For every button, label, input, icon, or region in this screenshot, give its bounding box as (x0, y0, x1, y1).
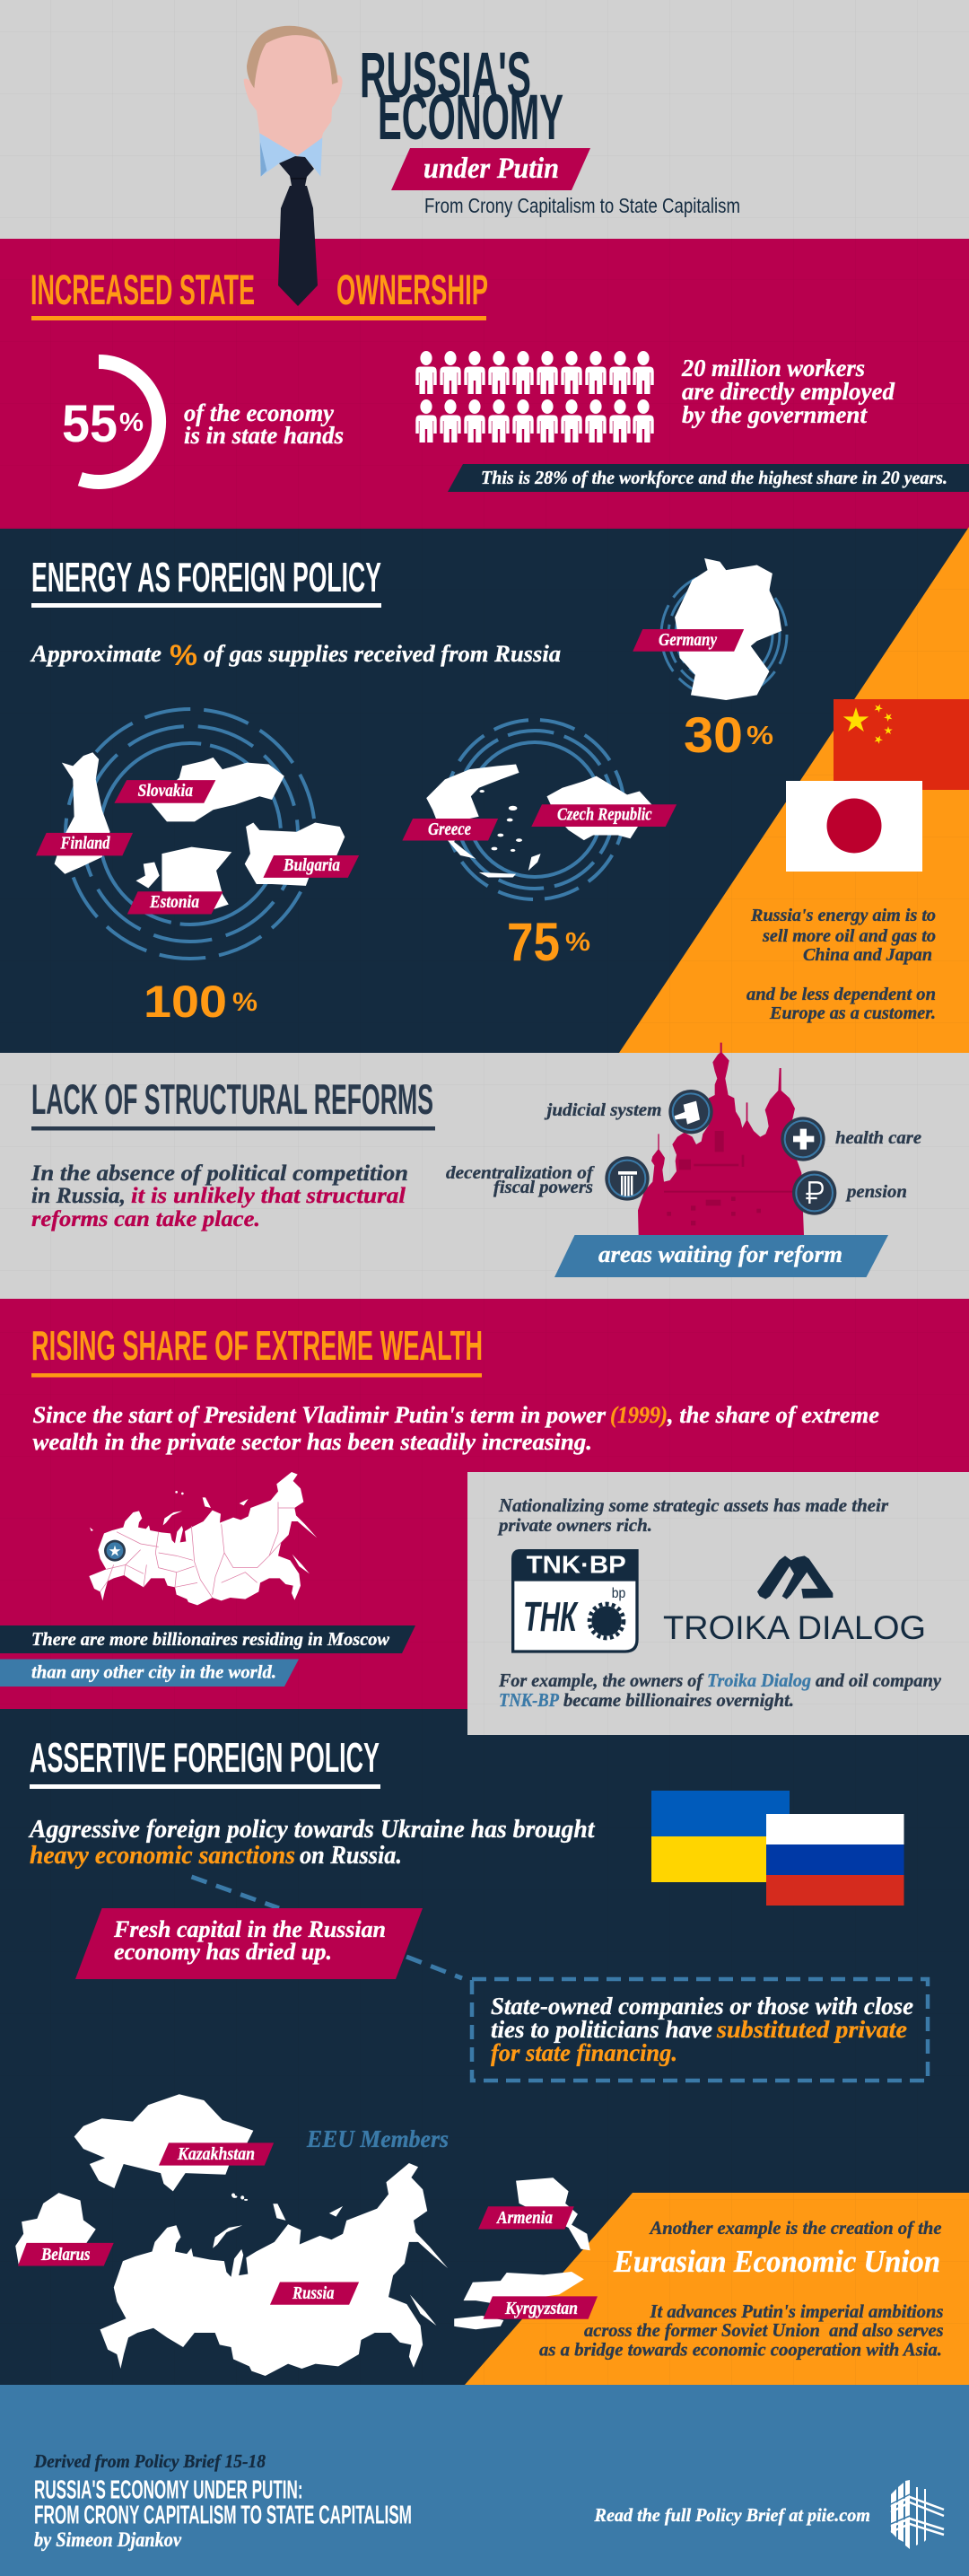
text: Russia's energy aim (746, 906, 936, 1023)
text: absence of political competition: In the absence of political competition (31, 1161, 408, 1186)
text: nationalizing strategic assets: private owners rich. (497, 1514, 652, 1536)
footer: source and title: Derived from Policy Brief 15-18 (33, 2450, 266, 2472)
text: since the start of Putin's term: wealth in the private sector has been steadily increasing. (32, 1429, 592, 1455)
footer: source and title: by Simeon Djankov (34, 2528, 182, 2551)
callout: fresh capital: Fresh capital in the Russian (113, 1916, 386, 1942)
map: Germany: Germany (659, 630, 717, 650)
text: 20 million workers (681, 355, 895, 428)
maps: EEU member states: Russia (292, 2283, 334, 2303)
logo: TNK-BP (511, 1549, 639, 1653)
stat: 75 percent: % (565, 928, 590, 957)
logo: TNK-BP: ТНК (523, 1593, 579, 1640)
heading: rising share of extreme wealth: RISING SHARE OF EXTREME WEALTH (31, 1322, 483, 1369)
callout: state-owned companies: substituted private (716, 2016, 907, 2043)
map: Russia with Moscow marker (89, 1472, 317, 1605)
heading: increased state ownership: INCREASED STATE (31, 266, 255, 313)
flag: Ukraine (651, 1791, 790, 1882)
label: EEU Members: EEU Members (306, 2125, 449, 2152)
illustration: cathedral silhouette (638, 1043, 804, 1235)
stat: 30 percent (684, 706, 773, 763)
text: 20 million workers: 20 million workers (681, 355, 865, 381)
donut stat: 55 percent: % (119, 408, 144, 437)
ribbon: any other city: than any other city in the world. (31, 1660, 276, 1682)
text: of the economy is in state hands (184, 399, 344, 449)
ribbon: areas waiting for reform (554, 1235, 888, 1277)
heading: assertive foreign policy (30, 1734, 380, 1789)
text: 20 million workers: by the government (682, 401, 868, 428)
subtitle: From Crony Capitalism to State Capitalism (424, 194, 740, 217)
callout: fresh capital (75, 1908, 423, 1979)
logo: Troika Dialog: TROIKA DIALOG (663, 1609, 926, 1646)
pictogram: 20 million workers (415, 351, 654, 442)
map group: 100 percent countries: Slovakia (138, 781, 193, 801)
logo: TNK-BP: bp (612, 1586, 625, 1601)
portrait illustration: Putin with tie (244, 26, 343, 306)
callout: state-owned companies: ties to politicians have (491, 2016, 712, 2043)
text: Russia's energy aim: Europe as a customer. (769, 1003, 936, 1023)
maps: EEU member states (15, 2094, 598, 2376)
stat: 30 percent: 30 (684, 706, 743, 763)
text panel: Eurasian Economic Union: Another example is the creation of the (649, 2217, 942, 2239)
donut stat: 55 percent (62, 362, 159, 482)
map group: 100 percent countries: Estonia (149, 892, 199, 912)
reform area labels: health care (835, 1128, 921, 1148)
ribbon: areas waiting for reform: areas waiting for reform (598, 1240, 842, 1267)
stat: 100 percent: 100 (144, 977, 227, 1027)
heading: increased state ownership: OWNERSHIP (336, 266, 488, 313)
text: owners became billionaires: became billionaires overnight. (563, 1689, 794, 1711)
text: since the start of Putin's term: , the share of extreme (667, 1402, 879, 1428)
ribbon: billionaires in Moscow: There are more billionaires residing in Moscow (31, 1628, 390, 1650)
heading: assertive foreign policy: ASSERTIVE FOREIGN POLICY (30, 1734, 380, 1781)
text: absence of political competition: in Russia, (31, 1184, 126, 1208)
text: owners became billionaires: and oil company (816, 1669, 942, 1691)
text: owners became billionaires (498, 1669, 942, 1711)
title: RUSSIA'S (360, 40, 531, 111)
maps: EEU member states: Kazakhstan (177, 2144, 255, 2164)
map group: 75 percent countries: Greece (428, 819, 471, 839)
footer: source and title (33, 2450, 412, 2551)
text panel: Eurasian Economic Union: across the former Soviet Union and also serves (584, 2319, 944, 2341)
text: owners became billionaires: Troika Dialog (707, 1669, 811, 1691)
donut stat: 55 percent: 55 (62, 395, 118, 453)
reform area labels: decentralization of (446, 1163, 595, 1183)
text: absence of political competition (31, 1161, 408, 1231)
callout: state-owned companies: State-owned companies or those with close (491, 1993, 913, 2020)
text: of the economy is in state hands: is in state hands (184, 422, 344, 449)
flag: Russia (766, 1814, 904, 1906)
text: of the economy is in state hands: of the economy (184, 399, 335, 426)
text: approximate percent of gas supplies: Approximate (30, 641, 162, 667)
icon: fiscal powers pillar (605, 1156, 650, 1201)
footer: source and title: FROM CRONY CAPITALISM TO STATE CAPITALISM (34, 2502, 412, 2530)
icon: pension ruble (792, 1170, 836, 1215)
reform area labels: judicial system (544, 1100, 662, 1120)
text panel: Eurasian Economic Union: Eurasian Economic Union (613, 2244, 940, 2279)
subtitle ribbon: under Putin (391, 148, 590, 190)
maps: EEU member states: Armenia (495, 2208, 553, 2228)
map group: 100 percent countries (36, 709, 359, 959)
logo: TNK-BP: TNK·BP (527, 1551, 626, 1579)
callout: state-owned companies (472, 1979, 928, 2081)
text: nationalizing strategic assets: Nationalizing some strategic assets has made their (498, 1494, 889, 1516)
logo: PIIE building (891, 2480, 944, 2549)
stat: 75 percent: 75 (507, 912, 560, 972)
text: since the start of Putin's term: (1999) (610, 1402, 668, 1428)
heading: rising share of extreme wealth (31, 1322, 483, 1377)
text: absence of political competition: reforms can take place. (31, 1207, 260, 1231)
text: approximate percent of gas supplies: % (170, 639, 197, 671)
text: nationalizing strategic assets (497, 1494, 889, 1536)
text: owners became billionaires: TNK-BP (499, 1689, 559, 1711)
stat: 30 percent: % (746, 722, 773, 750)
map group: 100 percent countries: Bulgaria (283, 855, 340, 875)
maps: EEU member states: Belarus (40, 2245, 91, 2265)
heading: energy as foreign policy: ENERGY AS FOREIGN POLICY (31, 554, 381, 600)
map group: 75 percent countries: Czech Republic (557, 804, 652, 824)
text panel: Eurasian Economic Union (539, 2217, 944, 2361)
banner: workforce share: This is 28% of the workforce and the highest share in 20 years. (481, 467, 947, 488)
logo: Troika Dialog (663, 1555, 926, 1646)
text: approximate percent of gas supplies (30, 639, 561, 671)
icon: judicial system gavel (668, 1090, 713, 1134)
text: since the start of Putin's term: Since the start of President Vladimir Putin's term in power (32, 1402, 607, 1428)
icon: health care cross (781, 1117, 825, 1161)
callout: state-owned companies: for state financing. (491, 2039, 677, 2066)
text: since the start of Putin's term (32, 1402, 879, 1455)
flag: Japan (786, 781, 922, 872)
text: aggressive foreign policy: heavy economic sanctions (30, 1842, 295, 1870)
text: aggressive foreign policy: on Russia. (300, 1842, 402, 1870)
map group: 75 percent countries (402, 720, 677, 899)
stat: 100 percent: % (232, 988, 258, 1017)
text: absence of political competition: it is unlikely that structural (131, 1184, 406, 1208)
ribbon: any other city (0, 1659, 299, 1687)
text: owners became billionaires: For example, the owners of (498, 1669, 704, 1691)
title: ECONOMY (378, 83, 563, 153)
text: aggressive foreign policy: Aggressive foreign policy towards Ukraine has brought (28, 1816, 596, 1844)
reform area labels: fiscal powers (493, 1178, 593, 1197)
footer: source and title: RUSSIA'S ECONOMY UNDER PUTIN: (34, 2475, 303, 2504)
map group: 100 percent countries: Finland (60, 833, 110, 853)
text: approximate percent of gas supplies: of gas supplies received from Russia (204, 641, 561, 667)
reform area labels: pension (845, 1182, 907, 1202)
ribbon: billionaires in Moscow (0, 1625, 415, 1653)
maps: EEU member states: Kyrgyzstan (504, 2299, 578, 2318)
text: Russia's energy aim: and be less dependent on (746, 985, 936, 1004)
stat: 100 percent (144, 977, 258, 1027)
heading: lack of structural reforms (31, 1075, 435, 1131)
title (360, 40, 563, 153)
map: Germany (633, 558, 787, 700)
text: aggressive foreign policy (28, 1816, 596, 1870)
text: Russia's energy aim: sell more oil and gas to (762, 926, 936, 946)
heading: energy as foreign policy (31, 554, 381, 608)
callout: fresh capital: economy has dried up. (114, 1939, 332, 1965)
text panel: Eurasian Economic Union: It advances Putin's imperial ambitions (650, 2300, 944, 2322)
subtitle ribbon: under Putin: under Putin (423, 153, 559, 185)
text panel: Eurasian Economic Union: as a bridge towards economic cooperation with Asia. (539, 2339, 942, 2361)
footer: read the full brief: Read the full Policy Brief at piie.com (594, 2504, 870, 2526)
reform area labels (446, 1100, 921, 1202)
text: Russia's energy aim: Russia's energy aim is to (750, 906, 936, 925)
text: 20 million workers: are directly employed (682, 378, 895, 405)
heading: lack of structural reforms: LACK OF STRUCTURAL REFORMS (31, 1075, 433, 1123)
text: Russia's energy aim: China and Japan (803, 945, 932, 965)
flag: China (834, 699, 969, 790)
dashed connector lines (192, 1877, 462, 1978)
